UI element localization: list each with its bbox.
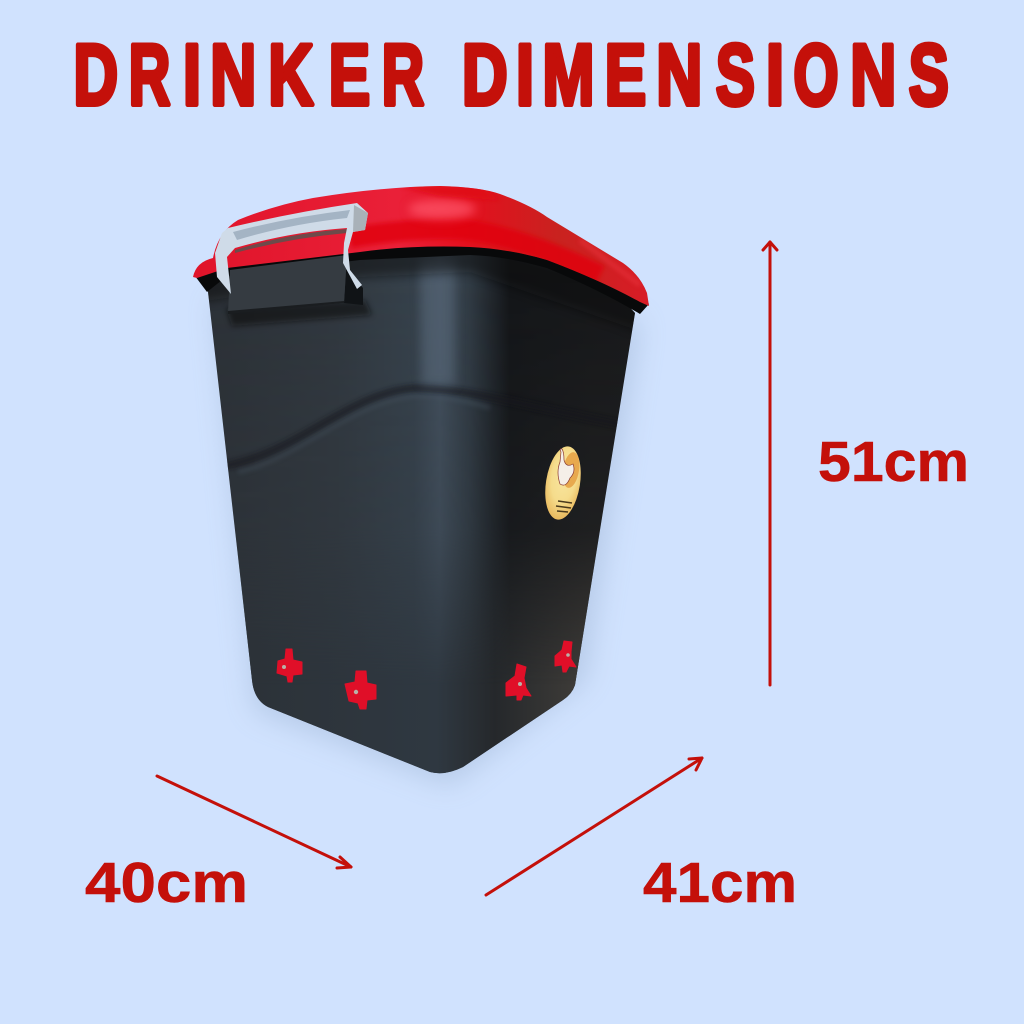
soft shadow behind bin: [215, 300, 640, 785]
lid glare: [408, 199, 476, 219]
title: K: [268, 28, 313, 124]
lid underside: [195, 241, 649, 314]
drinker nipple 2: [345, 671, 376, 709]
logo sticker: [540, 444, 586, 522]
title: D: [462, 28, 508, 124]
depth arrow: [157, 776, 351, 868]
drinker nipple 1: [277, 649, 302, 682]
latch shadow: [226, 300, 372, 326]
title: R: [129, 28, 170, 124]
latch block: [228, 255, 363, 314]
bin body: [208, 255, 635, 774]
title: I: [766, 28, 784, 124]
title: E: [329, 28, 370, 124]
drinker nipple 3: [506, 664, 531, 700]
height arrow: [763, 242, 777, 685]
label: height: 51cm: [818, 430, 969, 494]
grey handle: [215, 203, 368, 294]
drinker nipple 4: [555, 641, 576, 672]
title: D: [74, 28, 118, 124]
lid: [193, 186, 649, 306]
dark under lid: [208, 255, 635, 330]
lid rim highlight: [350, 229, 600, 275]
title: M: [542, 28, 594, 124]
title: E: [605, 28, 646, 124]
title: S: [716, 28, 755, 124]
title: R: [382, 28, 424, 124]
title: I: [183, 28, 201, 124]
corner highlight: [420, 262, 455, 385]
title: N: [210, 28, 256, 124]
label: width: 41cm: [643, 851, 797, 915]
ridge shading: [225, 388, 640, 466]
title: O: [794, 28, 838, 124]
label: depth: 40cm: [85, 851, 248, 915]
drinker bin photo: [180, 186, 680, 785]
title: [74, 28, 949, 124]
width arrow: [486, 758, 702, 895]
title: S: [909, 28, 949, 124]
title: I: [516, 28, 534, 124]
title: N: [850, 28, 896, 124]
title: N: [656, 28, 702, 124]
